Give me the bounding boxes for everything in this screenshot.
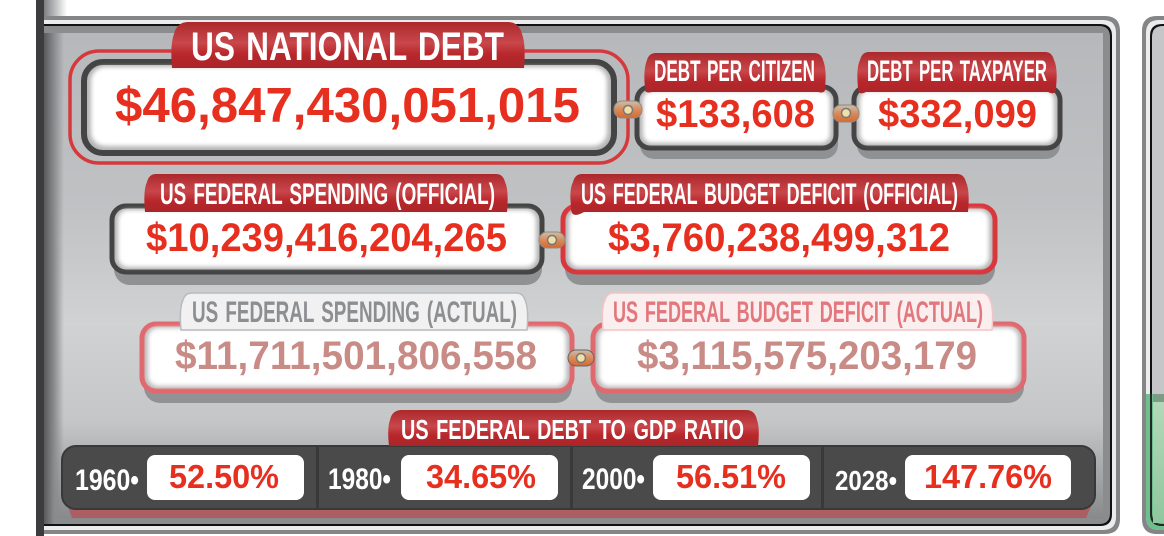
ratio 1960: 1960•	[75, 464, 139, 497]
heading: federal budget deficit actual	[602, 293, 993, 330]
heading: debt to GDP ratio: US FEDERAL DEBT TO GDP RATIO	[401, 414, 744, 445]
ratio 2000	[582, 455, 810, 500]
heading: federal budget deficit official	[570, 174, 969, 215]
value: federal spending official: $10,239,416,204,265	[146, 216, 507, 260]
heading: federal spending actual: US FEDERAL SPENDING (ACTUAL)	[192, 296, 517, 329]
ratio 1980: 34.65%	[426, 458, 536, 495]
ratio 1980: 1980•	[328, 463, 391, 496]
federal spending actual block	[142, 293, 572, 403]
panel: neighbouring green panel at right edge	[1142, 16, 1164, 534]
heading: debt to GDP ratio	[388, 410, 759, 446]
value: federal spending actual: $11,711,501,806,558	[175, 334, 537, 378]
connector: national debt to citizen	[614, 101, 642, 118]
connector: actual spending to deficit	[568, 350, 594, 366]
debt per citizen block	[637, 53, 838, 159]
ratio 2000: 56.51%	[676, 458, 786, 495]
ratio 2028: 2028•	[835, 465, 897, 496]
connector: official spending to deficit	[539, 232, 565, 248]
ratio 1960	[75, 455, 304, 500]
ratio 2028	[835, 455, 1071, 500]
value: debt per taxpayer: $332,099	[878, 93, 1037, 136]
ratio 2028: 147.76%	[924, 458, 1052, 495]
heading: federal spending official: US FEDERAL SPENDING (OFFICIAL)	[160, 178, 495, 211]
federal budget deficit official block	[563, 174, 995, 285]
heading: federal spending official	[144, 174, 508, 212]
federal budget deficit actual block	[593, 293, 1024, 403]
value: federal budget deficit actual: $3,115,575,203,179	[637, 334, 977, 378]
heading: debt per taxpayer	[857, 52, 1057, 93]
federal spending official block	[112, 174, 542, 285]
ratio 1980	[328, 455, 558, 500]
ratio 1960: 52.50%	[169, 458, 279, 495]
connector: citizen to taxpayer	[833, 105, 859, 122]
heading: debt per citizen: DEBT PER CITIZEN	[654, 55, 815, 88]
value: federal budget deficit official: $3,760,238,499,312	[608, 216, 950, 260]
heading: federal spending actual	[180, 293, 528, 330]
heading: debt per citizen	[644, 53, 826, 92]
debt to GDP ratio bar	[62, 410, 1096, 518]
heading: US National Debt: US NATIONAL DEBT	[191, 25, 504, 69]
national debt block	[70, 22, 628, 163]
panel above: partial white panel at top	[43, 0, 1119, 16]
value: national debt: $46,847,430,051,015	[115, 79, 580, 133]
value: debt per citizen: $133,608	[656, 93, 815, 136]
ratio 2000: 2000•	[582, 463, 645, 496]
debt per taxpayer block	[854, 52, 1060, 159]
